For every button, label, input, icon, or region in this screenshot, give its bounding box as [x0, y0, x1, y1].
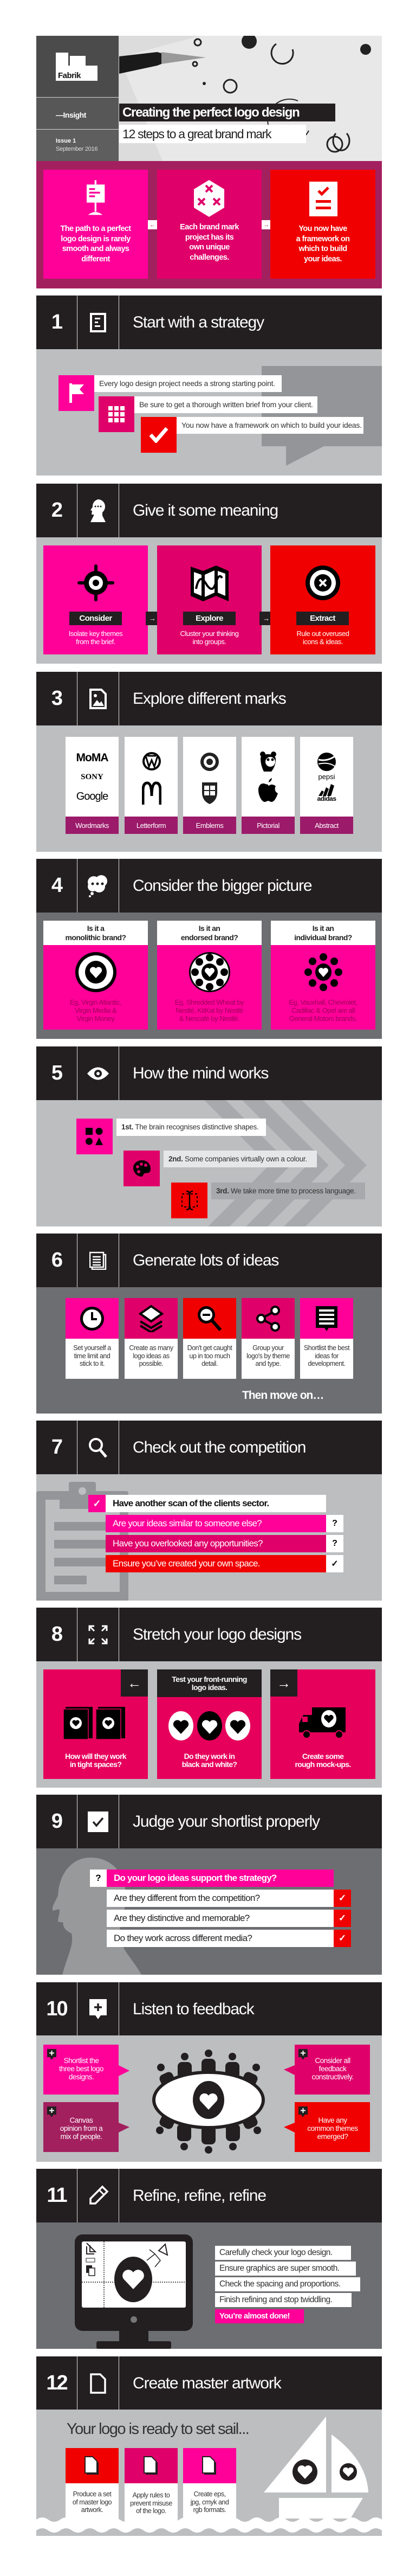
step 12 header: 12: [46, 2372, 67, 2394]
question list: Are they different from the competition?: [114, 1893, 259, 1903]
card tight spaces: ←: [127, 1674, 141, 1691]
step 1 body: [36, 349, 382, 476]
card pictorial: Pictorial: [257, 821, 280, 830]
step 9 body: [36, 1848, 382, 1975]
question list: ✓: [339, 1913, 346, 1923]
feedback box 1: designs.: [69, 2073, 94, 2081]
card wordmarks: Google: [76, 791, 108, 802]
feedback box 4: [284, 2102, 370, 2152]
step 10 body: [36, 2035, 382, 2162]
feedback box 3: constructively.: [311, 2073, 354, 2081]
row 1: [76, 1119, 266, 1154]
intro card 2: Each brand mark: [180, 223, 239, 232]
feedback box 2: opinion from a: [60, 2124, 102, 2132]
chevrons background: [204, 1100, 367, 1226]
intro card 3: your ideas.: [304, 255, 342, 264]
artwork card 2: [125, 2448, 178, 2524]
card mockups: [270, 1669, 375, 1779]
card monolithic: Virgin Money: [77, 1014, 114, 1023]
card emblems: Emblems: [196, 821, 223, 830]
card monolithic: monolithic brand?: [66, 933, 126, 941]
artwork card 3: Create eps,: [193, 2490, 226, 2498]
question list: Do they work across different media?: [114, 1933, 252, 1943]
card pictorial: [242, 737, 295, 834]
feedback box 2: mix of people.: [60, 2132, 102, 2141]
feedback box 4: common themes: [307, 2124, 358, 2132]
feedback box 2: Canvas: [70, 2116, 93, 2124]
feedback box 4: Have any: [318, 2116, 347, 2124]
card individual: Is it an: [313, 924, 334, 933]
card timer: [66, 1298, 119, 1379]
card mockups: rough mock-ups.: [295, 1760, 351, 1769]
step 8 header: [36, 1608, 382, 1661]
feedback box 3: [284, 2045, 370, 2095]
card share: [242, 1298, 295, 1379]
waves: [36, 2517, 382, 2533]
arrow 1: →: [149, 614, 156, 622]
step 5 header: [36, 1046, 382, 1100]
step 4 header: 4: [51, 874, 62, 897]
card list: [300, 1298, 353, 1379]
card individual: [271, 921, 375, 1030]
feedback box 3: Consider all: [315, 2057, 350, 2065]
card monolithic: Virgin Media &: [75, 1006, 116, 1014]
card consider: [43, 545, 148, 654]
arrow left: [148, 220, 157, 229]
intro card 2: project has its: [185, 233, 233, 242]
card abstract: [300, 737, 353, 834]
card list: development.: [308, 1360, 346, 1367]
card endorsed: [157, 921, 262, 1030]
step 5 header: 5: [51, 1062, 62, 1084]
card list: Shortlist the best: [304, 1344, 349, 1352]
subtitle: 12 steps to a great brand mark: [122, 127, 271, 141]
card monolithic: [43, 921, 148, 1030]
refine checklist: [215, 2246, 360, 2323]
head silhouette: [53, 1858, 141, 1975]
card black and white: logo ideas.: [192, 1683, 227, 1692]
card timer: stick to it.: [80, 1360, 105, 1367]
feedback box 1: [43, 2045, 129, 2095]
feedback box 1: Shortlist the: [64, 2057, 99, 2065]
card endorsed: Is it an: [199, 924, 220, 933]
intro card 2: [157, 170, 262, 279]
header hero: [36, 36, 382, 161]
artwork card 1: of master logo: [73, 2498, 112, 2506]
step 7 header: [36, 1421, 382, 1474]
step 6 header: 6: [51, 1249, 62, 1271]
step 7 header: 7: [51, 1436, 62, 1459]
checklist: ?: [332, 1539, 337, 1548]
step 12 body: [36, 2410, 382, 2536]
sail heading: Your logo is ready to set sail...: [67, 2420, 249, 2438]
card extract: icons & ideas.: [303, 638, 343, 646]
question list: [90, 1870, 351, 1947]
arrow 2: →: [263, 614, 270, 622]
artwork card 2: prevent misuse: [130, 2500, 172, 2507]
card endorsed: endorsed brand?: [181, 933, 238, 941]
refine checklist: Check the spacing and proportions.: [219, 2279, 340, 2289]
card list: ideas for: [315, 1352, 339, 1360]
artwork card 2: of the logo.: [136, 2507, 166, 2515]
row 2: [123, 1151, 317, 1186]
feedback box 4: emerged?: [317, 2132, 348, 2141]
card emblems: [183, 737, 236, 834]
card monolithic: Is it a: [87, 924, 104, 933]
step 2 header: 2: [51, 499, 62, 522]
step 8 header: Stretch your logo designs: [133, 1626, 301, 1643]
intro panel: [36, 161, 382, 288]
question list: Do your logo ideas support the strategy?: [114, 1873, 276, 1883]
clipboard: [36, 1482, 128, 1601]
card explore: Explore: [196, 614, 223, 623]
card abstract: pepsi: [318, 773, 335, 781]
subtitle: [119, 125, 306, 143]
sailboat: [264, 2417, 368, 2519]
checklist: Have you overlooked any opportunities?: [113, 1538, 263, 1549]
artwork card 3: jpg, cmyk and: [191, 2498, 229, 2506]
checklist: ✓: [93, 1498, 101, 1508]
step 3 body: [36, 725, 382, 852]
card timer: time limit and: [74, 1352, 110, 1360]
card timer: Set yourself a: [73, 1344, 111, 1352]
checklist: [88, 1495, 343, 1572]
intro card 3: which to build: [298, 245, 347, 253]
card individual: Eg, Vauxhall, Chevrolet,: [289, 998, 358, 1006]
step 10 header: [36, 1982, 382, 2036]
step 8 body: [36, 1661, 382, 1788]
card layers: Create as many: [129, 1344, 173, 1352]
step 1 header: Start with a strategy: [133, 313, 264, 331]
checklist: Are your ideas similar to someone else?: [113, 1518, 262, 1528]
checklist: Ensure you’ve created your own space.: [113, 1558, 260, 1569]
row 2: [99, 396, 317, 432]
step 3 header: 3: [51, 687, 62, 710]
row 3: You now have a framework on which to build your ideas.: [181, 421, 362, 429]
artwork card 1: [66, 2448, 119, 2524]
speech bubble: [262, 366, 382, 466]
card extract: [270, 545, 375, 654]
step 9 header: 9: [51, 1810, 62, 1833]
step 1 header: [36, 295, 382, 349]
intro card 1: different: [81, 255, 110, 264]
step 2 header: Give it some meaning: [133, 502, 278, 519]
card layers: logo ideas as: [133, 1352, 170, 1360]
card abstract: adidas: [317, 795, 336, 802]
step 9 header: Judge your shortlist properly: [133, 1813, 320, 1830]
card black and white: black and white?: [182, 1760, 237, 1769]
feedback box 2: [43, 2102, 129, 2152]
step 11 body: [36, 2222, 382, 2349]
artwork card 1: Produce a set: [73, 2490, 111, 2498]
step 10 header: Listen to feedback: [133, 2000, 254, 2018]
intro card 2: own unique: [189, 243, 230, 252]
intro card 1: The path to a perfect: [60, 224, 131, 233]
artwork card 3: [183, 2448, 236, 2524]
left column: insight: —Insight: [56, 111, 86, 119]
question list: Are they distinctive and memorable?: [114, 1913, 249, 1923]
refine checklist: You’re almost done!: [219, 2311, 290, 2321]
step 11 header: Refine, refine, refine: [133, 2187, 266, 2205]
card zoom: Don't get caught: [187, 1344, 232, 1352]
intro card 2: challenges.: [190, 253, 229, 261]
card individual: individual brand?: [294, 933, 352, 941]
refine checklist: Ensure graphics are super smooth.: [219, 2264, 339, 2273]
card zoom: [183, 1298, 236, 1379]
refine checklist: Carefully check your logo design.: [219, 2248, 333, 2257]
card zoom: up in too much: [190, 1352, 230, 1360]
card black and white: Do they work in: [184, 1752, 235, 1761]
card mockups: →: [277, 1674, 291, 1691]
artwork card 2: Apply rules to: [133, 2491, 170, 2499]
left column: issue: [36, 130, 119, 161]
step 10 header: 10: [46, 1997, 67, 2020]
card individual: Cadillac & Opel are all: [291, 1006, 355, 1014]
title: Creating the perfect logo design: [122, 105, 299, 120]
left column: insight: [36, 98, 119, 129]
card consider: Isolate key themes: [69, 629, 122, 638]
card abstract: Abstract: [315, 821, 339, 830]
card share: Group your: [252, 1344, 284, 1352]
step 2 body: [36, 537, 382, 664]
row 1: [58, 375, 282, 411]
arrow right: [262, 220, 271, 229]
title: [119, 104, 335, 121]
row 3: [171, 1183, 365, 1218]
card layers: possible.: [139, 1360, 163, 1367]
row 3: [141, 417, 363, 453]
intro card 3: a framework on: [296, 234, 349, 243]
feedback box 1: three best logo: [59, 2065, 103, 2073]
step 11 header: 11: [47, 2184, 67, 2207]
question list: ?: [95, 1873, 101, 1883]
step 4 header: Consider the bigger picture: [133, 877, 312, 895]
left column: logo: [36, 36, 119, 97]
card mockups: Create some: [302, 1752, 343, 1761]
checklist: ?: [332, 1519, 337, 1528]
left column: issue: Issue 1: [56, 138, 76, 144]
step 5 header: How the mind works: [133, 1064, 268, 1082]
step 5 body: [36, 1100, 382, 1226]
step 6 header: [36, 1234, 382, 1287]
monitor graphic: [75, 2234, 193, 2349]
feedback box 3: feedback: [319, 2065, 346, 2073]
then move on: Then move on…: [242, 1389, 323, 1402]
refine checklist: Finish refining and stop twiddling.: [219, 2295, 332, 2304]
card share: logo's by theme: [246, 1352, 290, 1360]
arrow left: ←: [150, 221, 155, 228]
step 11 header: [36, 2169, 382, 2222]
card wordmarks: [66, 737, 119, 834]
card share: and type.: [256, 1360, 281, 1367]
question list: ✓: [339, 1893, 346, 1903]
arrow 2: [259, 612, 273, 625]
step 6 body: [36, 1287, 382, 1414]
step 2 header: [36, 484, 382, 537]
checklist: Have another scan of the clients sector.: [113, 1498, 269, 1508]
row 1: Every logo design project needs a strong starting point.: [99, 379, 275, 388]
arrow right: →: [263, 221, 269, 228]
card wordmarks: SONY: [81, 773, 103, 781]
card letterform: Letterform: [136, 821, 166, 830]
step 4 header: [36, 859, 382, 913]
card black and white: [157, 1669, 262, 1779]
left column: logo: Fabrik: [58, 71, 81, 80]
card letterform: [125, 737, 178, 834]
step 3 header: Explore different marks: [133, 690, 286, 708]
intro card 3: You now have: [298, 224, 347, 233]
intro card 1: logo design is rarely: [61, 234, 131, 243]
step 12 header: [36, 2356, 382, 2410]
card endorsed: & Nescafé by Nestlé.: [179, 1014, 239, 1023]
card explore: [157, 545, 262, 654]
step 6 header: Generate lots of ideas: [133, 1251, 278, 1269]
card monolithic: Eg, Virgin Atlantic,: [70, 998, 121, 1006]
row 2: Be sure to get a thorough written brief from your client.: [139, 400, 313, 409]
card endorsed: Eg, Shredded Wheat by: [175, 998, 244, 1006]
intro card 1: smooth and always: [62, 245, 129, 253]
left column: issue: September 2016: [56, 146, 98, 152]
artwork card 1: artwork.: [81, 2506, 103, 2514]
step 9 header: [36, 1795, 382, 1848]
card layers: [125, 1298, 178, 1379]
step 3 header: [36, 672, 382, 725]
question list: ✓: [339, 1933, 346, 1943]
intro card 1: [43, 170, 148, 279]
artwork card 3: rgb formats.: [193, 2506, 226, 2514]
card individual: General Motors brands.: [289, 1014, 357, 1023]
row 3: 3rd. We take more time to process language.: [216, 1187, 356, 1195]
step 1 header: 1: [51, 311, 62, 333]
step 4 body: [36, 913, 382, 1039]
step 8 header: 8: [51, 1623, 62, 1646]
intro card 3: [270, 170, 375, 279]
card explore: into groups.: [193, 638, 226, 646]
step 7 header: Check out the competition: [133, 1438, 306, 1456]
step 12 header: Create master artwork: [133, 2374, 281, 2392]
card tight spaces: in tight spaces?: [70, 1760, 121, 1769]
card black and white: Test your front-running: [172, 1674, 247, 1683]
row 1: 1st. The brain recognises distinctive shapes.: [121, 1123, 258, 1131]
card wordmarks: MoMA: [76, 751, 108, 764]
card tight spaces: [43, 1669, 148, 1779]
card zoom: detail.: [202, 1360, 218, 1367]
card wordmarks: Wordmarks: [75, 821, 109, 830]
row 2: 2nd. Some companies virtually own a colour.: [168, 1155, 307, 1163]
photo: sketches: [119, 36, 382, 161]
step 7 body: [36, 1474, 382, 1601]
card tight spaces: How will they work: [65, 1752, 126, 1761]
card consider: from the brief.: [76, 638, 115, 646]
checklist: ✓: [331, 1559, 339, 1569]
pen: [119, 52, 179, 74]
meeting table graphic: [152, 2050, 265, 2154]
card explore: Cluster your thinking: [180, 629, 238, 638]
card endorsed: Nestlé, KitKat by Nestlé: [176, 1006, 243, 1014]
card extract: Extract: [310, 614, 335, 623]
card consider: Consider: [79, 614, 112, 623]
card extract: Rule out overused: [296, 629, 349, 638]
arrow 1: [146, 612, 159, 625]
